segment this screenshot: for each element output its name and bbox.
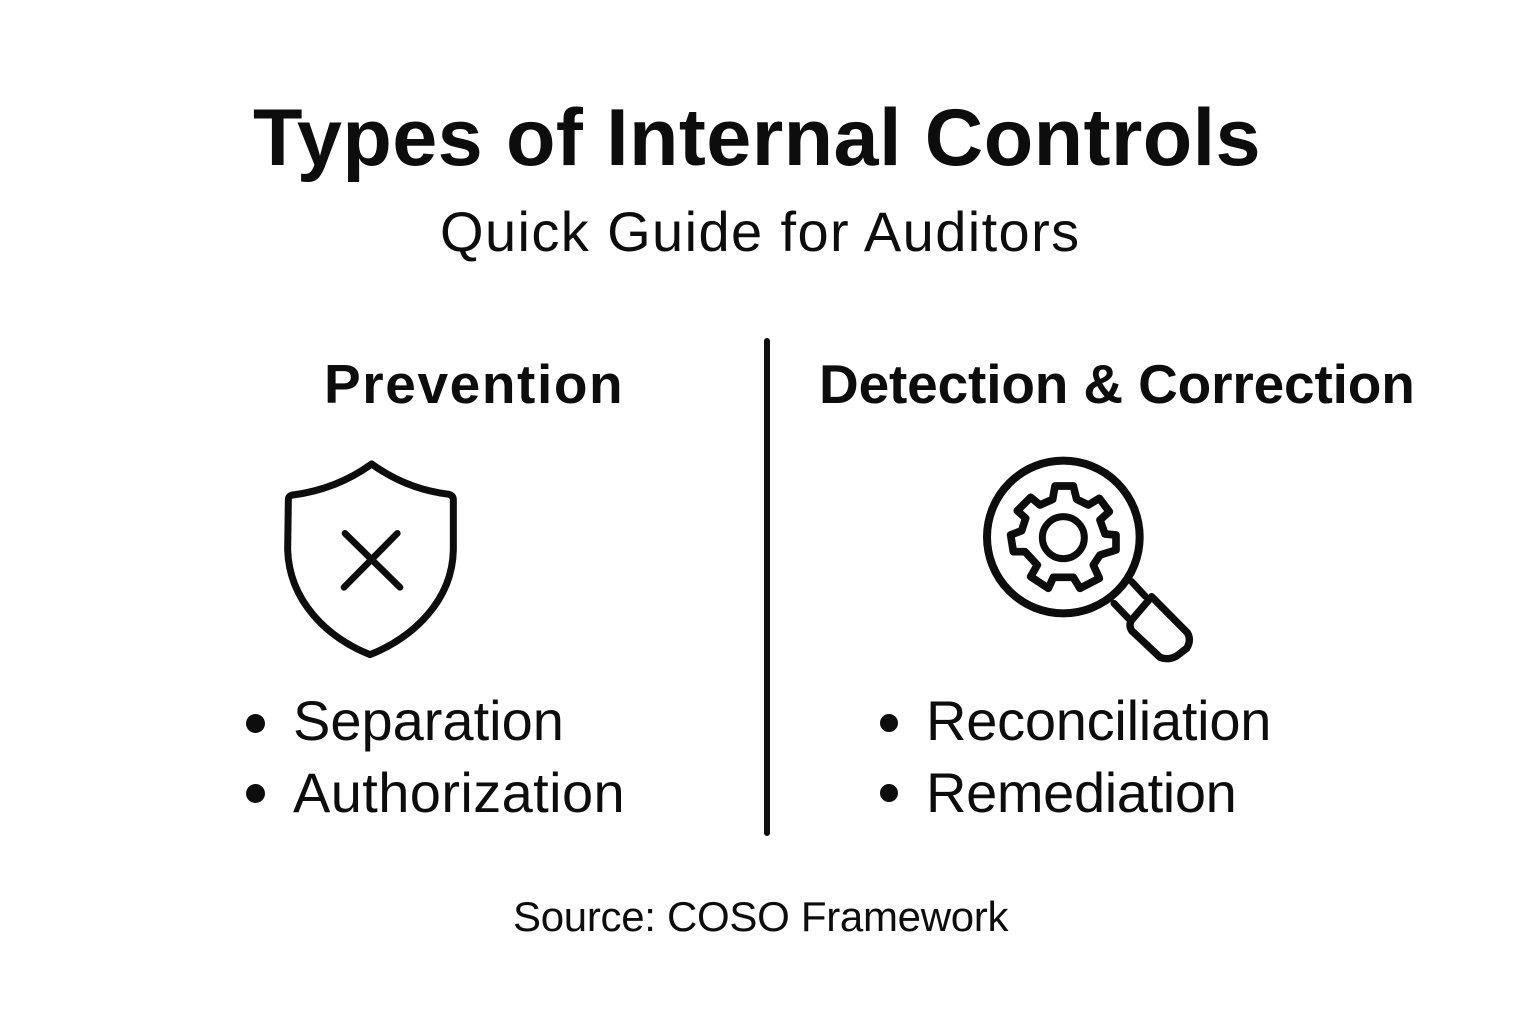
list: prevention items — [246, 689, 625, 824]
subtitle: Quick Guide for Auditors — [440, 200, 1081, 263]
bullet: authorization — [246, 784, 265, 803]
heading: Detection & Correction: Detection & Correction — [819, 353, 1415, 415]
source note: Source: COSO Framework — [513, 893, 1008, 940]
item: Reconciliation: Reconciliation — [926, 689, 1271, 752]
divider line — [764, 338, 770, 836]
item: Authorization: Authorization — [293, 761, 625, 824]
list: detection items — [880, 689, 1271, 824]
icon: shield with x — [284, 460, 457, 658]
icon: magnifier with gear — [983, 456, 1194, 662]
bullet: reconciliation — [880, 714, 898, 732]
heading: Prevention: Prevention — [324, 353, 624, 415]
item: Separation: Separation — [293, 689, 564, 752]
bullet: remediation — [880, 784, 898, 802]
item: Remediation: Remediation — [926, 761, 1236, 824]
title: Types of Internal Controls — [253, 93, 1261, 183]
bullet: separation — [246, 714, 265, 733]
